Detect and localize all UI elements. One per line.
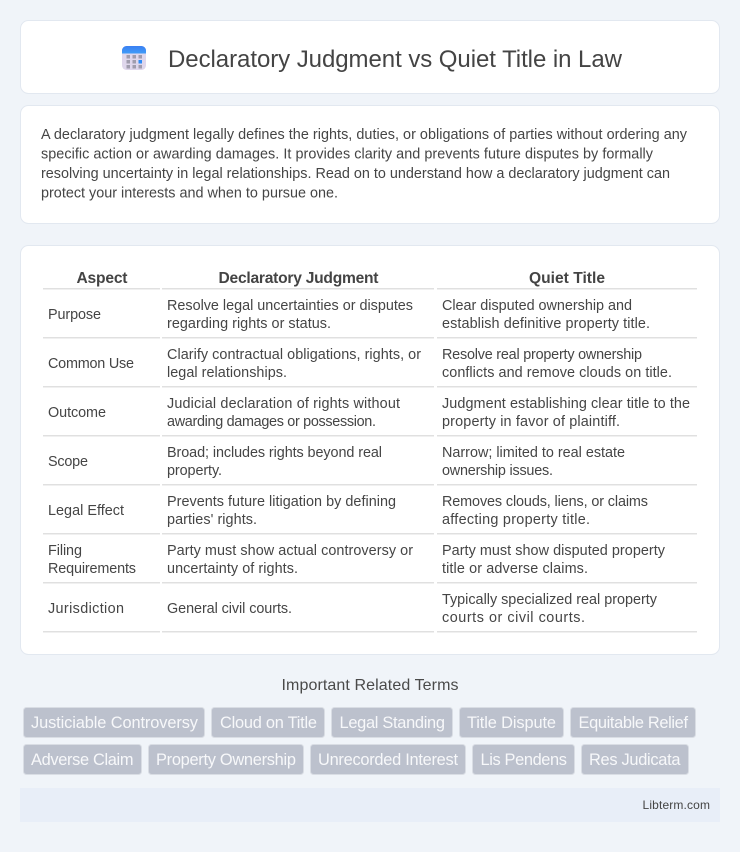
row: Purpose: Clear disputed ownership and: [442, 298, 632, 314]
row: Legal Effect: affecting property title.: [442, 512, 590, 528]
table header: Aspect: [76, 270, 128, 287]
row: Jurisdiction: Typically specialized real property: [442, 592, 658, 608]
footer: [20, 788, 720, 822]
row: Common Use: Clarify contractual obligations, rights, or: [167, 347, 421, 363]
row: Outcome: awarding damages or possession.: [167, 414, 376, 430]
row: Jurisdiction: [48, 592, 658, 626]
row: Scope: property.: [167, 463, 222, 479]
tag: Title Dispute: [467, 714, 556, 732]
tag: [24, 744, 142, 774]
panel: comparison table: [20, 246, 720, 654]
row: Scope: Broad; includes rights beyond real: [167, 445, 382, 461]
tag: Unrecorded Interest: [318, 751, 458, 769]
tag: Legal Standing: [340, 714, 445, 732]
tag: Lis Pendens: [480, 751, 567, 769]
row: Filing Requirements: uncertainty of rights.: [167, 561, 298, 577]
tag: Property Ownership: [156, 751, 296, 769]
tag: [310, 744, 466, 774]
tag: [24, 708, 204, 738]
row: Outcome: Judicial declaration of rights without: [167, 396, 400, 412]
text block: introduction: protect your interests and when to pursue one.: [41, 186, 338, 202]
tag: [460, 708, 564, 738]
row: Common Use: [48, 347, 672, 381]
row: Filing Requirements: Filing: [48, 543, 82, 559]
tag: Res Judicata: [589, 751, 681, 769]
row: Legal Effect: parties' rights.: [167, 512, 257, 528]
panel: header: [20, 20, 720, 94]
row: Scope: Narrow; limited to real estate: [442, 445, 625, 461]
row: Outcome: property in favor of plaintiff.: [442, 414, 620, 430]
row: Filing Requirements: [48, 543, 666, 577]
text block: introduction: [41, 127, 688, 202]
row: Legal Effect: Prevents future litigation by defining: [167, 494, 396, 510]
footer: Libterm.com: [642, 798, 710, 812]
row: Common Use: legal relationships.: [167, 365, 287, 381]
tag: [332, 708, 452, 738]
row: Jurisdiction: General civil courts.: [167, 601, 292, 617]
tag: [212, 708, 324, 738]
row: Filing Requirements: Requirements: [48, 561, 136, 577]
row: Outcome: Outcome: [48, 405, 106, 421]
row: Purpose: Resolve legal uncertainties or disputes: [167, 298, 413, 314]
tag: Equitable Relief: [578, 714, 688, 732]
row: Purpose: establish definitive property title.: [442, 316, 650, 332]
table header: Declaratory Judgment: [218, 270, 378, 287]
row: Purpose: regarding rights or status.: [167, 316, 331, 332]
panel: introduction: [20, 106, 720, 224]
table header: Quiet Title: [529, 270, 605, 287]
row: Scope: ownership issues.: [442, 463, 553, 479]
icon: calendar: [122, 46, 146, 70]
tag: [570, 708, 696, 738]
tags: related terms: [24, 708, 696, 774]
row: Scope: Scope: [48, 454, 88, 470]
row: Outcome: [48, 396, 690, 430]
row: Filing Requirements: title or adverse claims.: [442, 561, 588, 577]
row: Scope: [48, 445, 625, 479]
table header: [76, 270, 605, 287]
title: Declaratory Judgment vs Quiet Title in Law: [168, 46, 623, 73]
heading: related terms: Important Related Terms: [282, 677, 458, 694]
row: Filing Requirements: Party must show disputed property: [442, 543, 666, 559]
row: Legal Effect: [48, 494, 648, 528]
row: Legal Effect: Legal Effect: [48, 503, 124, 519]
row: Common Use: conflicts and remove clouds on title.: [442, 365, 672, 381]
row: Legal Effect: Removes clouds, liens, or claims: [442, 494, 648, 510]
row: Purpose: [48, 298, 650, 332]
row: Jurisdiction: courts or civil courts.: [442, 610, 585, 626]
text block: introduction: A declaratory judgment legally defines the rights, duties, or obligations of parties without ordering any: [41, 127, 688, 143]
text block: introduction: resolving uncertainty in legal relationships. Read on to understand how a declaratory judgment can: [41, 166, 670, 182]
tag: [148, 744, 304, 774]
row: Jurisdiction: Jurisdiction: [48, 601, 124, 617]
tag: Cloud on Title: [220, 714, 317, 732]
row: Common Use: Common Use: [48, 356, 134, 372]
text block: introduction: specific action or awarding damages. It provides clarity and prevents future disputes by formally: [41, 146, 654, 162]
tag: Justiciable Controversy: [31, 714, 199, 732]
tag: [582, 744, 688, 774]
row: Outcome: Judgment establishing clear title to the: [442, 396, 690, 412]
row: Common Use: Resolve real property ownership: [442, 347, 642, 363]
row: Purpose: Purpose: [48, 307, 101, 323]
row: Filing Requirements: Party must show actual controversy or: [167, 543, 413, 559]
tag: Adverse Claim: [31, 751, 134, 769]
tag: [472, 744, 574, 774]
